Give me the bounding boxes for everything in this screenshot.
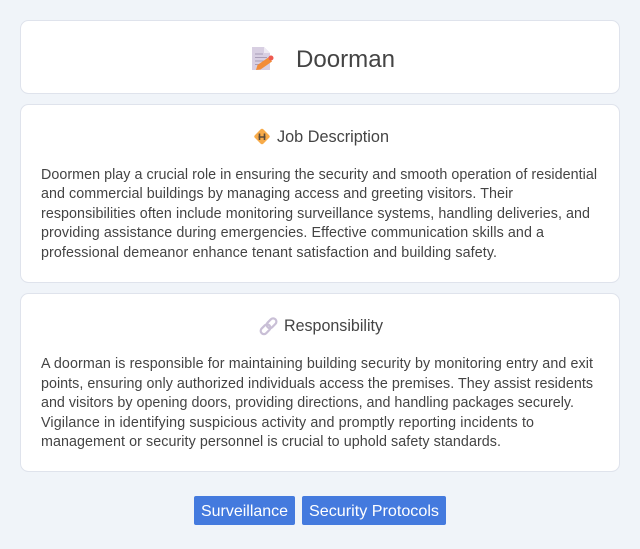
tag: Surveillance — [194, 496, 295, 525]
heading: Job Description: Job Description — [277, 128, 389, 146]
icon: chain link — [259, 317, 278, 335]
text block: responsibility: management or security personnel is crucial to uphold safety standards. — [41, 434, 501, 450]
tag: Security Protocols: Security Protocols — [309, 503, 439, 520]
text block: responsibility: Vigilance in identifying suspicious activity and promptly reporting incidents to — [41, 415, 534, 431]
panel: job description — [20, 104, 620, 282]
text block: job description: responsibilities often include monitoring surveillance systems, handling deliveries, and — [41, 206, 590, 222]
icon: construction sign — [254, 128, 270, 145]
text block: job description — [41, 167, 597, 261]
tag: Surveillance: Surveillance — [201, 503, 288, 520]
panel: responsibility — [20, 294, 620, 472]
text block: responsibility — [41, 356, 593, 450]
text block: job description: Doormen play a crucial role in ensuring the security and smooth operation of residential — [41, 167, 597, 183]
text block: job description: and commercial buildings by managing access and greeting visitors. Their — [41, 186, 513, 202]
heading: Responsibility: Responsibility — [284, 317, 384, 335]
tag: Security Protocols — [302, 496, 446, 525]
heading: Doorman: Doorman — [296, 46, 395, 73]
icon: document with pencil — [252, 47, 274, 70]
text block: responsibility: A doorman is responsible for maintaining building security by monitoring entry and exit — [41, 356, 593, 372]
text block: responsibility: points, ensuring only authorized individuals access the premises. They assist residents — [41, 376, 593, 392]
text block: responsibility: and visitors by opening doors, providing directions, and handling packages securely. — [41, 395, 574, 411]
text block: job description: professional demeanor enhance tenant satisfaction and building safety. — [41, 245, 497, 261]
panel: title card — [20, 20, 620, 94]
text block: job description: providing assistance during emergencies. Effective communication skills and a — [41, 225, 544, 241]
